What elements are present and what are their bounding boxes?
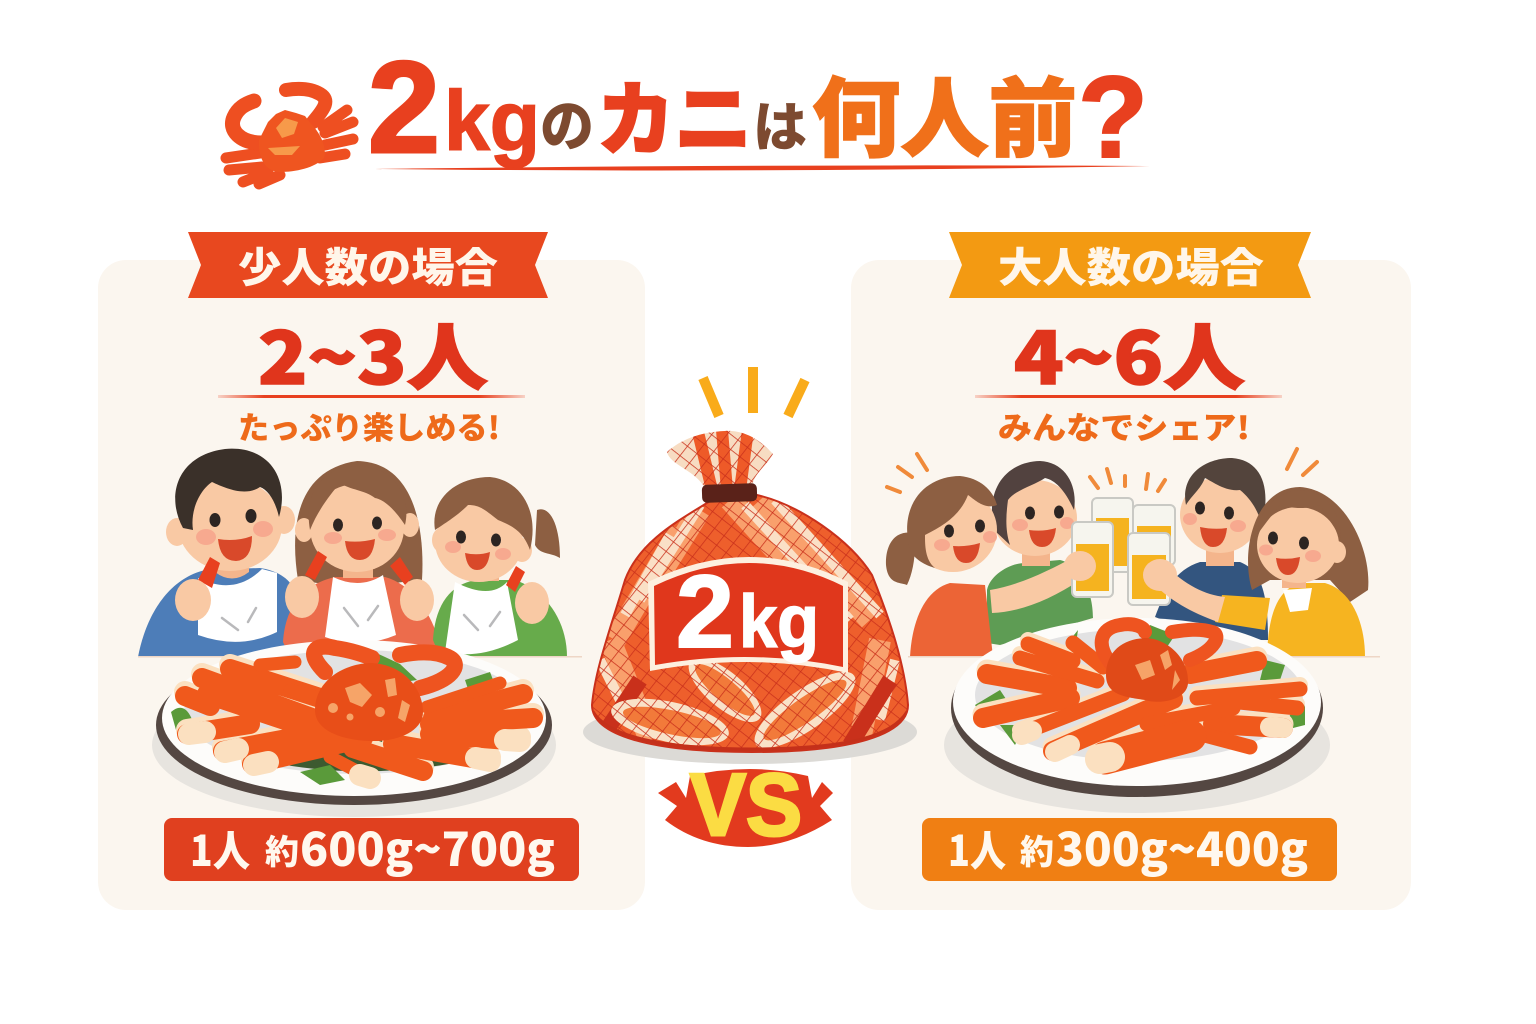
VS badge: VS [690,755,802,854]
panel: large group [851,232,1411,910]
person: girl [283,461,440,657]
crab claws [1102,624,1216,665]
illustration: four people toasting [886,449,1368,657]
banner: small group: 少人数の場合 [238,234,498,294]
bag label: kg [739,580,819,663]
portion pill: large group: 約 [1020,825,1054,874]
portion pill: large group: 300g~400g [1056,814,1308,880]
panel background [851,260,1411,910]
rays [703,367,805,416]
divider line [218,395,525,398]
subheading: たっぷり楽しめる! [238,403,500,448]
beer glasses [1064,498,1175,597]
bag tie [702,483,757,503]
crab legs [185,662,533,778]
illustration: crab plate [908,618,1380,813]
title: 何人前: 何人前 [812,49,1077,174]
person: boy in green [987,461,1093,645]
title: は: は [753,83,807,162]
illustration: three people eating crab [138,449,567,657]
crab shell [315,663,423,741]
divider line [975,395,1282,398]
net top [667,430,773,486]
title: question mark: ? [1078,52,1148,182]
panel: small group [98,232,645,910]
panel background [98,260,645,910]
heading: 2~3 people: 2~3人 [258,300,488,405]
subheading: みんなでシェア! [998,403,1250,448]
portion pill: small group: 約 [265,825,299,874]
icon: crab [226,89,353,184]
illustration: crab plate [138,640,582,817]
title [226,34,1150,184]
title: 2kg [368,34,540,180]
bag shadow [583,700,917,764]
portion pill: large group [922,814,1337,881]
crab legs [983,640,1300,759]
person: girl in yellow [1143,487,1368,657]
person: boy [138,449,295,657]
title: 2kg: 2 [368,34,440,180]
plate [908,618,1380,813]
title: の: の [540,82,594,163]
portion pill: large group: 1人 [948,818,1006,879]
portion pill: small group [164,814,579,881]
title underline [375,165,1150,170]
front beer glass [1128,533,1170,605]
VS badge [658,755,833,854]
crab claws [314,647,455,688]
portion pill: small group: 600g~700g [300,814,555,880]
center: 2kg crab bag [583,367,917,764]
title: 2kg: kg [444,74,540,168]
person: boy in navy [1155,458,1268,640]
banner: small group [188,232,548,298]
bag label: 2 [676,554,734,669]
bag label [648,554,848,673]
heading: 4~6 people: 4~6人 [1014,300,1245,405]
plate [138,640,582,817]
banner: large group [949,232,1311,298]
person: girl with ponytail [886,476,1080,657]
portion pill: small group: 1人 [190,818,250,879]
person: girl with ponytail [432,477,567,657]
banner: large group: 大人数の場合 [998,234,1264,294]
crab shell [1106,638,1188,702]
title: カニ: カニ [597,56,752,172]
bag body [585,490,915,761]
sparkle lines [887,449,1317,492]
